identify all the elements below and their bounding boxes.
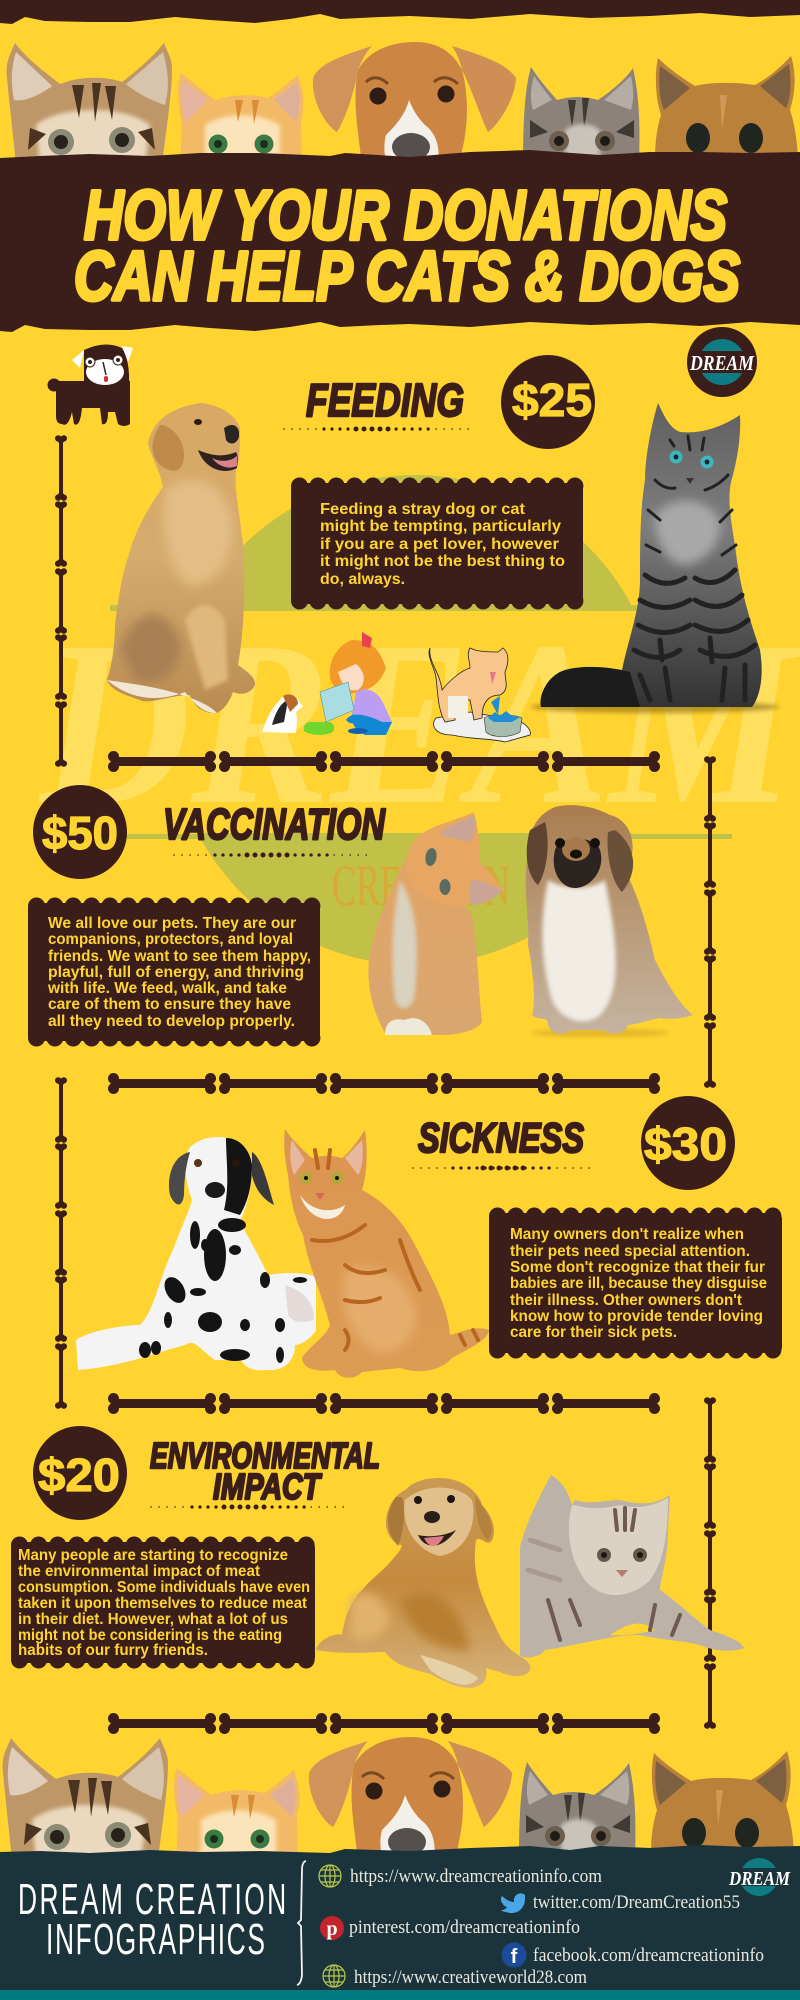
- panel: feeding: [107, 355, 780, 742]
- text box: environmental impact: Many people are starting to recognize: [18, 1547, 288, 1564]
- link: pinterest: pinterest.com/dreamcreationinfo: [349, 1917, 580, 1938]
- panel: environmental impact: [11, 1426, 744, 1688]
- illustration: cartoon cat and water bowl: [429, 648, 530, 742]
- footer brand: DREAM CREATION: [18, 1874, 286, 1924]
- text box: vaccination: care of them to ensure they have: [48, 996, 291, 1013]
- link: pinterest: p: [326, 1918, 338, 1940]
- bones: horizontal row 2: [108, 1073, 660, 1094]
- link: facebook: facebook.com/dreamcreationinfo: [533, 1945, 764, 1966]
- link: creativeworld28 website: https://www.creativeworld28.com: [354, 1967, 587, 1988]
- bones: horizontal row 4: [108, 1713, 660, 1734]
- text box: environmental impact: in their diet. However, what a lot of us: [18, 1611, 288, 1628]
- text box: feeding: do, always.: [320, 571, 405, 588]
- text box: sickness: know how to provide tender loving: [510, 1308, 763, 1325]
- text box: vaccination: all they need to develop properly.: [48, 1013, 295, 1030]
- text box: sickness: Some don't recognize that their fur: [510, 1259, 765, 1276]
- heading: environmental impact: IMPACT: [213, 1466, 322, 1507]
- text box: sickness: [489, 1213, 782, 1353]
- title band: [0, 150, 800, 332]
- top torn band: [0, 0, 800, 24]
- icon: dream logo badge: [687, 327, 757, 397]
- photo: pekingese dog: [526, 805, 693, 1037]
- icon: dream logo footer: DREAM: [728, 1868, 791, 1890]
- text box: environmental impact: taken it upon themselves to reduce meat: [18, 1595, 308, 1612]
- peeking animals top row: [7, 42, 798, 165]
- text box: feeding: [291, 483, 583, 604]
- icon: dream logo badge: DREAM: [689, 351, 755, 375]
- text box: environmental impact: might not be considering is the eating: [18, 1627, 282, 1644]
- price badge: $30: $30: [644, 1118, 727, 1170]
- title: [74, 176, 740, 315]
- text box: vaccination: companions, protectors, and loyal: [48, 931, 293, 948]
- text box: feeding: it might not be the best thing to: [320, 553, 565, 570]
- text box: environmental impact: [11, 1542, 315, 1663]
- bones: horizontal row 3: [108, 1393, 660, 1414]
- text box: sickness: babies are ill, because they disguise: [510, 1275, 767, 1292]
- price badge: $50: [33, 785, 127, 879]
- text box: sickness: their pets need special attention.: [510, 1243, 750, 1260]
- photo: orange tabby cat: [284, 1129, 489, 1378]
- price badge: $20: [33, 1426, 127, 1520]
- photo: dalmatian: [76, 1137, 316, 1370]
- link: facebook: [502, 1942, 764, 1968]
- link: twitter: twitter.com/DreamCreation55: [533, 1892, 740, 1913]
- bones: left vertical row 2: [55, 1077, 67, 1409]
- text box: feeding: Feeding a stray dog or cat: [320, 501, 526, 518]
- text box: sickness: their illness. Other owners don't: [510, 1292, 743, 1309]
- text box: vaccination: [28, 903, 320, 1041]
- panel: sickness: [76, 1096, 782, 1378]
- watermark: dream creation logo: CREATION: [332, 853, 510, 918]
- text box: environmental impact: consumption. Some individuals have even: [18, 1579, 310, 1596]
- dotted rule: [284, 428, 469, 430]
- bones: horizontal row 1: [108, 751, 660, 772]
- heading: feeding: FEEDING: [306, 374, 464, 426]
- photo: golden retriever lying: [316, 1478, 530, 1688]
- icon: dream logo footer: [728, 1858, 791, 1896]
- footer: [0, 1845, 800, 2000]
- heading: sickness: SICKNESS: [418, 1114, 584, 1161]
- photo: golden retriever sitting: [107, 403, 255, 713]
- link: facebook: f: [511, 1946, 518, 1968]
- panel: vaccination: [28, 785, 693, 1041]
- link: dreamcreationinfo website: https://www.dreamcreationinfo.com: [350, 1866, 602, 1887]
- dotted rule: [174, 854, 370, 856]
- price badge: $25: [501, 355, 595, 449]
- heading: environmental impact: [150, 1435, 380, 1507]
- heading: environmental impact: ENVIRONMENTAL: [150, 1435, 380, 1476]
- text box: vaccination: friends. We want to see them happy,: [48, 948, 311, 965]
- watermark: dream creation logo: [38, 475, 800, 965]
- photo: tabby kitten crouching: [520, 1475, 744, 1657]
- photo: grey maine coon cat: [530, 403, 780, 713]
- text box: environmental impact: the environmental impact of meat: [18, 1563, 261, 1580]
- text box: vaccination: with life. We feed, walk, and take: [47, 980, 287, 997]
- footer brand: [18, 1874, 286, 1964]
- footer brand: INFOGRAPHICS: [46, 1914, 265, 1964]
- text box: sickness: Many owners don't realize when: [510, 1226, 744, 1243]
- price badge: $30: [641, 1096, 735, 1190]
- divider: [297, 1861, 306, 1985]
- peeking animals bottom row: [3, 1737, 794, 1860]
- bones: left vertical row 1: [55, 435, 67, 767]
- text box: environmental impact: habits of our furry friends.: [18, 1642, 208, 1659]
- dotted rule: [413, 1167, 592, 1169]
- text box: feeding: might be tempting, particularly: [320, 518, 561, 535]
- heading: vaccination: VACCINATION: [163, 800, 386, 849]
- dotted rule: [151, 1506, 347, 1508]
- price badge: $25: $25: [512, 374, 592, 426]
- text box: vaccination: We all love our pets. They are our: [48, 915, 296, 932]
- bones: right vertical row 1: [704, 756, 716, 1088]
- illustration: beagle puppy, girl and food bowl: [262, 632, 392, 735]
- bones: right vertical row 2: [704, 1397, 716, 1729]
- text box: feeding: if you are a pet lover, however: [320, 536, 559, 553]
- price badge: $50: $50: [42, 807, 118, 859]
- text box: sickness: care for their sick pets.: [510, 1324, 677, 1341]
- photo: tilting orange kitten: [368, 812, 503, 1035]
- icon: puppy mascot: [48, 344, 133, 426]
- text box: vaccination: playful, full of energy, and thriving: [48, 964, 304, 981]
- price badge: $20: $20: [38, 1449, 120, 1501]
